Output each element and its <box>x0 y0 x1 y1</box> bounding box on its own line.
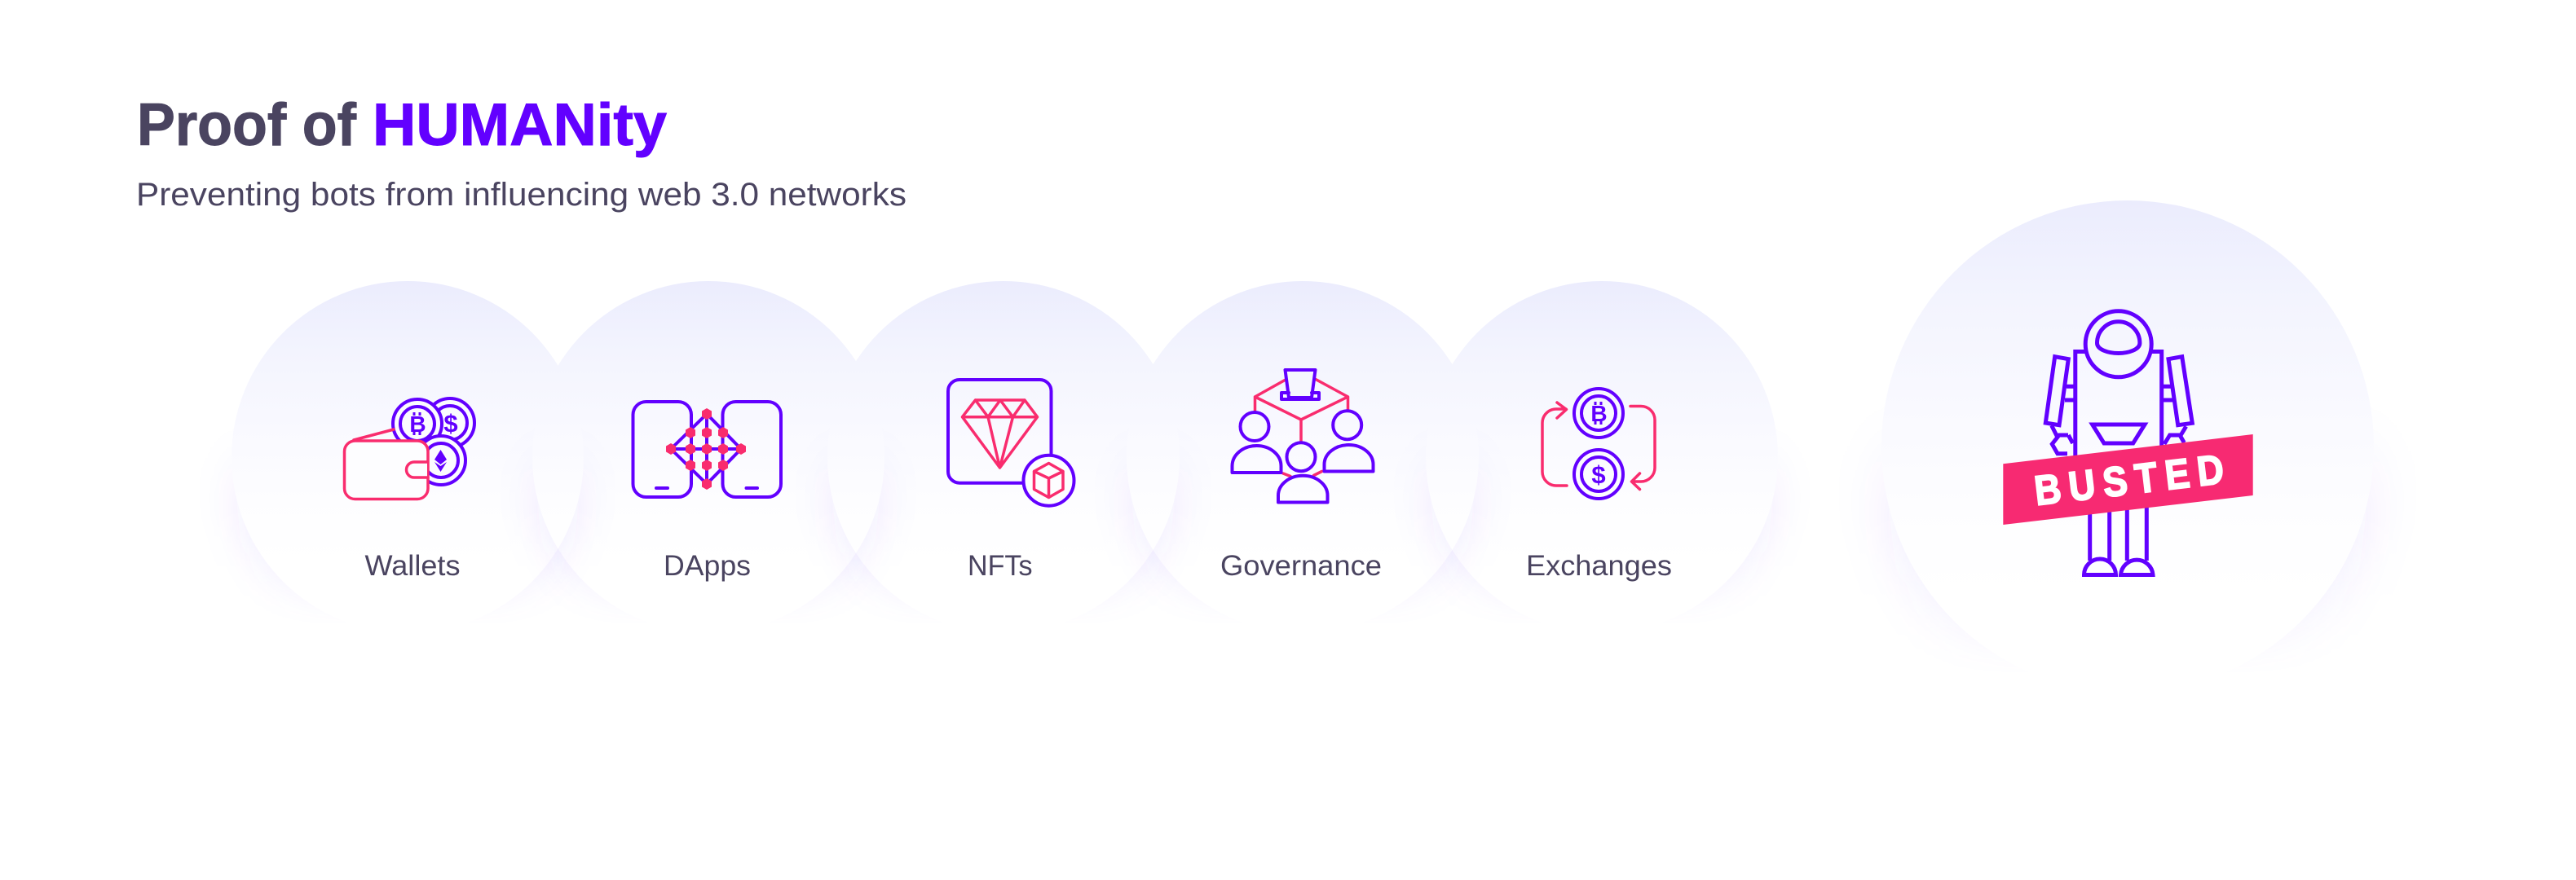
icon: governance ballot and people <box>1233 370 1373 502</box>
icon: DApps network between phones <box>633 402 781 497</box>
icon: NFT diamond card <box>948 380 1074 506</box>
icon: wallet with coins: $ <box>443 409 458 438</box>
infographic canvas <box>139 101 2371 598</box>
icon: exchange coins with arrows <box>1542 389 1655 499</box>
label: NFTs: NFTs <box>968 550 1032 582</box>
icon: wallet with coins: B <box>409 411 426 437</box>
title: HUMANity <box>373 92 667 158</box>
background circles <box>233 200 2371 598</box>
icon: wallet with coins <box>344 398 474 499</box>
banner: busted: BUSTED <box>2032 447 2226 515</box>
title: Proof of <box>137 92 357 158</box>
label: Exchanges: Exchanges <box>1526 550 1672 582</box>
icon: robot <box>2045 311 2192 575</box>
icon: exchange coins with arrows: $ <box>1591 460 1606 489</box>
banner: busted <box>2003 434 2253 525</box>
subtitle: Preventing bots from influencing web 3.0 networks <box>136 177 906 213</box>
title <box>137 92 667 158</box>
icon: exchange coins with arrows: B <box>1590 401 1608 426</box>
label: Wallets: Wallets <box>365 550 460 582</box>
label: Governance: Governance <box>1220 550 1382 582</box>
label: DApps: DApps <box>664 550 751 582</box>
